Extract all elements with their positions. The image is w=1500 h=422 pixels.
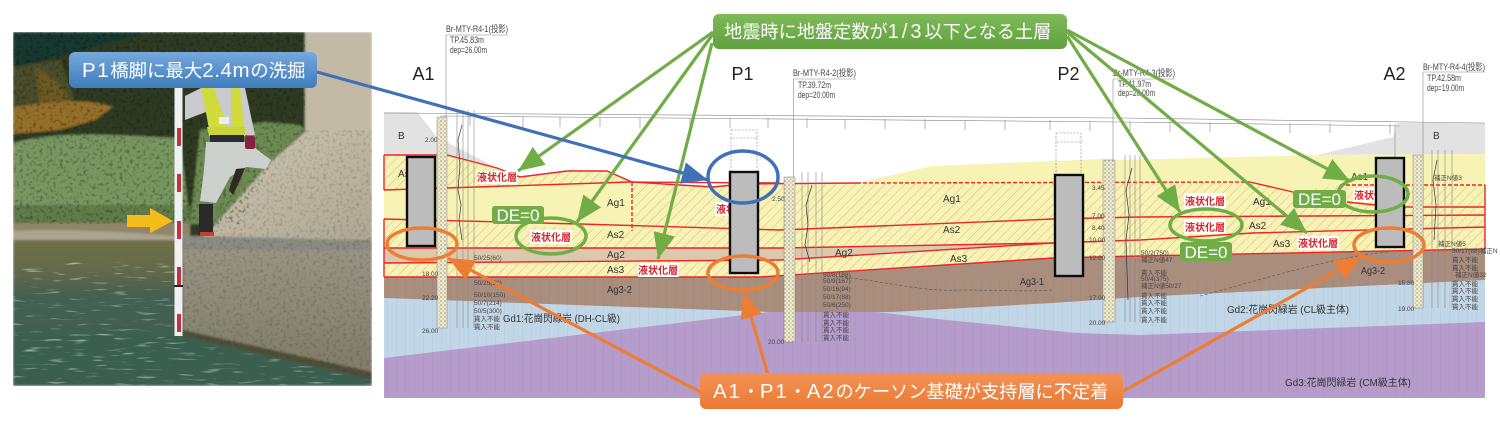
ellipse: scour at P1 (708, 151, 778, 203)
borehole log P2: Br-MTY-R4-3: 20.00 (1089, 320, 1106, 327)
borehole log A2: Br-MTY-R4-4: 15.80 (1398, 280, 1415, 287)
borehole log A2: Br-MTY-R4-4 (1398, 61, 1498, 313)
borehole log P1: Br-MTY-R4-2: 50/9(167) (823, 278, 851, 285)
borehole log P2: Br-MTY-R4-3: 50/2(750) (1141, 250, 1169, 257)
tag: DE=0 centre: DE=0 (1184, 243, 1228, 262)
photo: measuring staff (174, 88, 183, 336)
photo texture: concrete (183, 130, 372, 380)
layer labels: Gd2:花崗閃緑岩 (CL級主体) (1227, 303, 1349, 316)
borehole log P1: Br-MTY-R4-2: TP.39.72m (798, 80, 831, 90)
photo: scour measurement at P1 pier (13, 32, 372, 386)
layer: sand and gravel (384, 154, 1485, 277)
borehole log P2: Br-MTY-R4-3: 貫入不能 (1141, 291, 1168, 300)
borehole log P2: Br-MTY-R4-3: 貫入不能 (1141, 306, 1168, 315)
borehole log P2: Br-MTY-R4-3: 補正N値50/27 (1141, 281, 1182, 290)
borehole log A1: Br-MTY-R4-1: 50/7(214) (474, 300, 502, 307)
borehole log A1: Br-MTY-R4-1: Br-MTY-R4-1(投影) (446, 23, 508, 34)
borehole log A1: Br-MTY-R4-1: 2.00 (425, 137, 438, 144)
borehole log A2: Br-MTY-R4-4: TP.42.58m (1427, 73, 1461, 83)
layer labels: As2 (943, 225, 961, 236)
borehole log A2: Br-MTY-R4-4: Br-MTY-R4-4(投影) (1423, 61, 1485, 72)
icon: yellow water-level arrow (127, 208, 173, 233)
red layer boundaries (384, 155, 1485, 277)
borehole log A2: Br-MTY-R4-4: 19.00 (1398, 306, 1415, 313)
layer: Gd3 granodiorite (384, 310, 1485, 398)
borehole log P1: Br-MTY-R4-2: 50/16(94) (823, 286, 851, 293)
arrows: green to reduced layers (518, 30, 1350, 259)
abutment and pier names: P2 (1057, 64, 1080, 84)
abutment and pier names: P1 (731, 64, 754, 84)
photo: surveyor standing on footing (185, 88, 271, 236)
borehole log P2: Br-MTY-R4-3: 12.00 (1089, 255, 1106, 262)
layer labels: B (1433, 131, 1440, 142)
layer labels: As2 (607, 230, 625, 241)
borehole log P1: Br-MTY-R4-2: 50/8(188) (823, 272, 851, 279)
arrow: blue from scour label to P1 (317, 72, 708, 180)
caisson foundation A1 (407, 157, 435, 246)
borehole log A1: Br-MTY-R4-1: 50/5(300) (474, 308, 502, 315)
layer labels: As1 (398, 169, 416, 180)
callout: caisson not seated (700, 373, 1123, 409)
liquefied layer tags: 液状化層 (638, 264, 678, 277)
layer labels (398, 131, 1440, 389)
borehole log P2: Br-MTY-R4-3: dep=20.00m (1118, 88, 1155, 98)
borehole log P1: Br-MTY-R4-2: 50/6(250) (823, 302, 851, 309)
callout: scour label (69, 52, 317, 88)
borehole log A2: Br-MTY-R4-4: 貫入不能 (1452, 255, 1478, 264)
caisson foundation P2 (1055, 175, 1083, 276)
borehole log P1: Br-MTY-R4-2 (768, 67, 856, 346)
borehole log P2: Br-MTY-R4-3 (1089, 67, 1182, 327)
borehole log P1: Br-MTY-R4-2: dep=20.00m (798, 90, 835, 100)
borehole log A2: Br-MTY-R4-4: 貫入不能 (1452, 286, 1478, 295)
geological cross-section (384, 112, 1485, 398)
callout: caisson not seated: A1・P1・A2のケーソン基礎が支持層に不定着 (713, 380, 1108, 403)
borehole log A1: Br-MTY-R4-1 (422, 23, 508, 335)
ellipses: DE=0 layers (516, 176, 1408, 254)
tag: DE=0 right: DE=0 (1298, 190, 1341, 209)
layer labels: As3 (607, 265, 625, 276)
caisson foundation A2 (1376, 158, 1404, 247)
liquefied layer tags: 液状化層 (477, 171, 517, 184)
liquefied layer tags (477, 171, 1395, 277)
liquefied layer tags: 液状化層 (716, 203, 756, 216)
borehole log P2: Br-MTY-R4-3: 貫入不能 (1141, 315, 1168, 324)
borehole log A1: Br-MTY-R4-1: 18.00 (422, 271, 439, 278)
layer labels: Ag3-2 (1361, 266, 1385, 277)
layer labels: Gd1:花崗閃緑岩 (DH-CL級) (503, 312, 620, 325)
borehole log A2: Br-MTY-R4-4: 貫入不能 (1452, 294, 1478, 303)
borehole log P2: Br-MTY-R4-3: 貫入不能 (1141, 298, 1168, 307)
caisson foundation P1 (730, 172, 758, 273)
liquefied layer tags: 液状化層 (1185, 195, 1225, 208)
borehole log P1: Br-MTY-R4-2: Br-MTY-R4-2(投影) (793, 67, 856, 78)
fill layer B right (1317, 123, 1485, 155)
borehole log A1: Br-MTY-R4-1: 26.00 (422, 328, 439, 335)
borehole log P1: Br-MTY-R4-2: 20.00 (768, 339, 785, 346)
layer labels: As1 (1351, 172, 1369, 183)
borehole log A1: Br-MTY-R4-1: 貫入不能 (474, 314, 500, 323)
callout: scour label: P1橋脚に最大2.4mの洗掘 (82, 59, 305, 82)
borehole log P2: Br-MTY-R4-3: TP.41.97m (1118, 79, 1151, 89)
borehole log A2: Br-MTY-R4-4: dep=19.00m (1427, 83, 1464, 93)
layer labels: As3 (1273, 239, 1291, 250)
abutment and pier names: A1 (412, 64, 435, 84)
layer labels: B (398, 131, 405, 142)
layer labels: As2 (1249, 221, 1267, 232)
borehole log P2: Br-MTY-R4-3: 7.00 (1092, 213, 1105, 220)
callout: seismic layers: 地震時に地盤定数が1/3以下となる土層 (724, 21, 1051, 43)
borehole log P2: Br-MTY-R4-3: 10.00 (1089, 237, 1106, 244)
arrows: orange to caisson bases (448, 257, 1362, 393)
borehole log P2: Br-MTY-R4-3: 3.45 (1092, 185, 1105, 192)
borehole log P2: Br-MTY-R4-3: 8.40 (1092, 225, 1105, 232)
borehole log A2: Br-MTY-R4-4: 貫入不能 (1452, 302, 1478, 311)
layer: Ag3 gravel (384, 249, 1485, 312)
liquefied layer tags: 液状化層 (531, 231, 571, 244)
borehole log P2: Br-MTY-R4-3: 補正N値47 (1141, 255, 1173, 264)
liquefied layer tags: 液状化層 (1298, 237, 1338, 250)
layer labels: Ag2 (607, 250, 625, 261)
layer labels: Ag1 (607, 198, 625, 209)
borehole log A2: Br-MTY-R4-4: 貫入不能 (1452, 263, 1478, 272)
layer labels: Ag1 (1253, 197, 1271, 208)
borehole log A2: Br-MTY-R4-4: 貫入不能 (1452, 279, 1478, 288)
borehole log P1: Br-MTY-R4-2: 50/17(88) (823, 294, 851, 301)
callout: seismic layers (713, 14, 1067, 49)
layer: Ag2 clay (384, 243, 1053, 263)
layer labels: Ag3-2 (607, 285, 632, 296)
borehole log P1: Br-MTY-R4-2: 貫入不能 (823, 310, 850, 319)
borehole log A2: Br-MTY-R4-4: 補正N値5 (1438, 239, 1466, 248)
borehole log P2: Br-MTY-R4-3: Br-MTY-R4-3(投影) (1113, 67, 1175, 78)
borehole log P1: Br-MTY-R4-2: 貫入不能 (823, 318, 850, 327)
borehole log A2: Br-MTY-R4-4: 50/17(88)補正N (1452, 246, 1498, 255)
borehole log P2: Br-MTY-R4-3: 貫入不能 (1141, 268, 1168, 277)
tag: DE=0 left: DE=0 (496, 206, 540, 225)
borehole log P2: Br-MTY-R4-3: 17.00 (1089, 295, 1106, 302)
photo texture: foliage (13, 32, 305, 226)
borehole log A1: Br-MTY-R4-1: dep=26.00m (450, 45, 487, 55)
fill layer B left (384, 112, 497, 168)
borehole log A1: Br-MTY-R4-1: 50/25(50) (474, 280, 502, 287)
borehole log A1: Br-MTY-R4-1: TP.45.83m (450, 35, 484, 45)
borehole log A2: Br-MTY-R4-4: 補正N値3 (1434, 173, 1462, 182)
borehole log A1: Br-MTY-R4-1: 貫入不能 (474, 322, 500, 331)
borehole log A1: Br-MTY-R4-1: 50/10(150) (474, 292, 505, 299)
abutment and pier names: A2 (1383, 64, 1406, 84)
borehole log P1: Br-MTY-R4-2: 2.50 (772, 196, 785, 203)
layer labels: Ag3-1 (1020, 277, 1044, 288)
borehole log P1: Br-MTY-R4-2: 貫入不能 (823, 333, 850, 342)
abutment and pier names (412, 64, 1406, 84)
photo texture: water ripples (13, 262, 372, 386)
layer labels: As3 (950, 254, 968, 265)
layer labels: Ag1 (943, 194, 961, 205)
layer labels: Gd3:花崗閃緑岩 (CM級主体) (1285, 376, 1411, 389)
borehole log P2: Br-MTY-R4-3: 50/4(375) (1141, 276, 1169, 283)
borehole log A1: Br-MTY-R4-1: 22.20 (422, 295, 439, 302)
liquefied layer tags: 液状化層 (1354, 189, 1394, 202)
borehole log A1: Br-MTY-R4-1: 50/25(60) (474, 255, 502, 262)
layer: Gd1 Gd2 weathered granodiorite (384, 280, 1485, 370)
liquefied layer tags: 液状化層 (1185, 221, 1225, 234)
ellipses: caisson base not seated (387, 228, 1424, 290)
borehole log P1: Br-MTY-R4-2: 貫入不能 (823, 325, 850, 334)
layer: hatched liquefiable zones (384, 155, 1485, 277)
borehole log A2: Br-MTY-R4-4: 補正N値32 (1455, 270, 1487, 279)
layer labels: Ag2 (835, 248, 853, 259)
bridge deck outline (384, 113, 1485, 175)
